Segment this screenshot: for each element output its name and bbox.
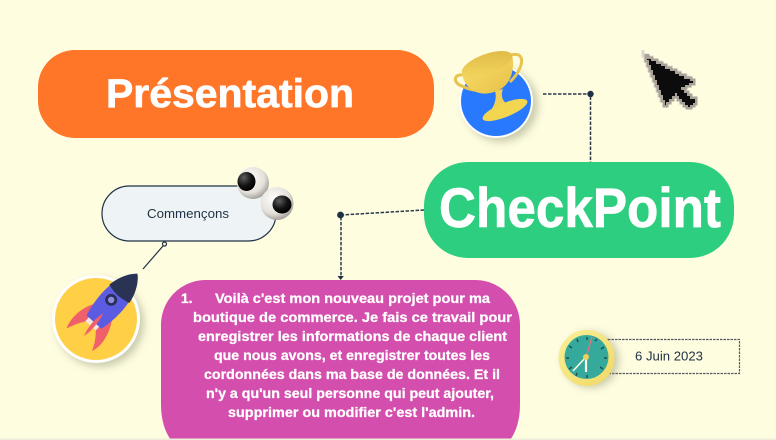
bottom edge <box>0 438 776 440</box>
description text: supprimer ou modifier c'est l'admin. <box>228 405 475 420</box>
description text: 1. <box>181 291 193 306</box>
heading pill: Présentation <box>38 50 434 138</box>
heading pill: CheckPoint <box>424 162 734 258</box>
heading pill: Présentation: Présentation <box>106 72 354 116</box>
callout: Commençons <box>102 186 276 241</box>
icon: pixel cursor <box>643 50 695 107</box>
connector: CheckPoint to description <box>337 210 424 280</box>
description text <box>181 291 513 420</box>
description text: Voilà c'est mon nouveau projet pour ma <box>215 291 490 306</box>
panel: description <box>161 280 520 440</box>
heading pill: CheckPoint: CheckPoint <box>439 176 721 239</box>
date box <box>608 340 740 374</box>
connector: trophy to CheckPoint <box>543 91 594 162</box>
date box: 6 Juin 2023 <box>635 350 703 364</box>
icon: googly eyes <box>237 167 294 220</box>
icon: trophy on blue circle <box>455 46 538 142</box>
icon: rocket on yellow circle <box>52 261 152 367</box>
description text: enregistrer les informations de chaque client <box>198 329 507 344</box>
description text: boutique de commerce. Je fais ce travail pour <box>193 310 513 325</box>
connector: callout to rocket <box>143 242 166 269</box>
icon: clock <box>558 330 619 388</box>
description text: n'y a qu'un seul personne qui peut ajouter, <box>206 386 494 401</box>
callout: Commençons: Commençons <box>147 206 230 221</box>
description text: cordonnées dans ma base de données. Et il <box>204 367 500 382</box>
description text: que nous avons, et enregistrer toutes les <box>214 348 490 363</box>
